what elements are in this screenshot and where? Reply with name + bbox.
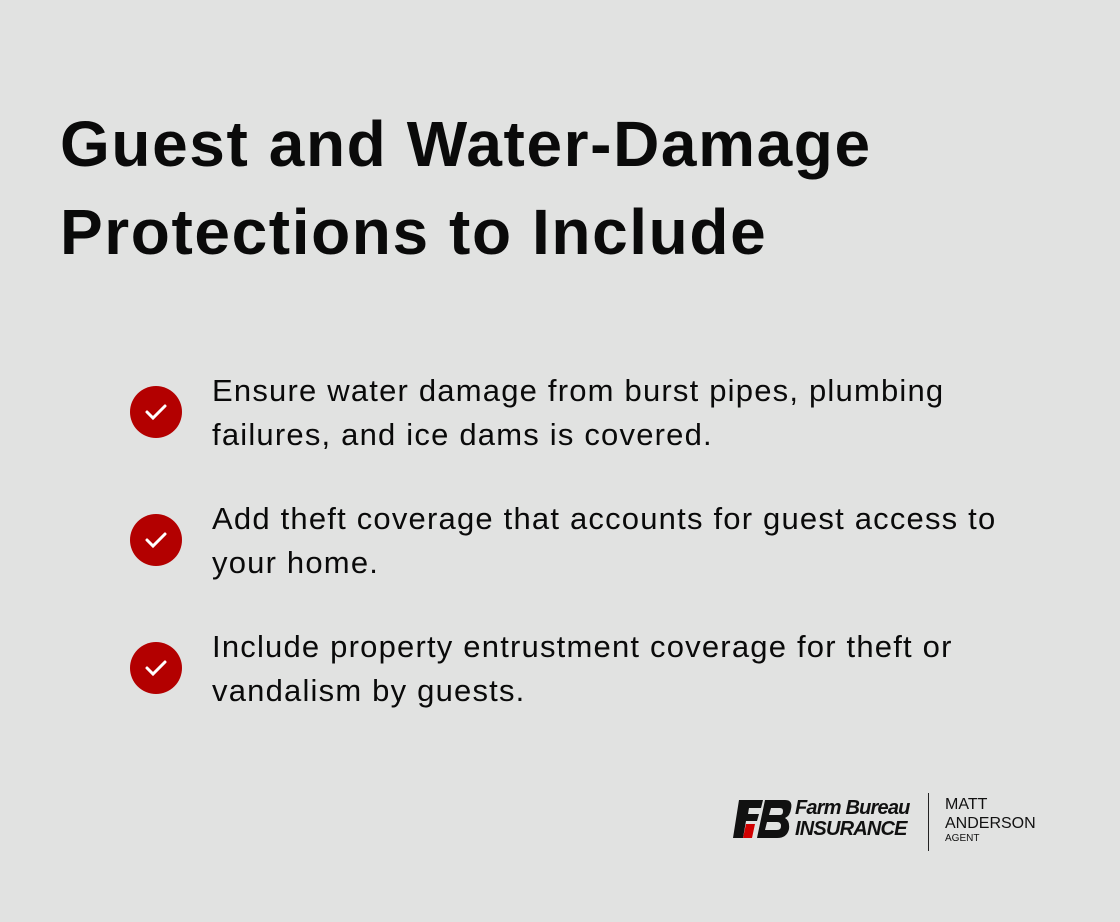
text: Add theft coverage that accounts for guest access to your home. xyxy=(212,501,996,580)
item: entrustment xyxy=(130,629,953,708)
text: Farm Bureau Insurance: INSURANCE xyxy=(795,818,907,840)
icon: check xyxy=(130,514,182,566)
icon: check xyxy=(130,386,182,438)
title: Protections to Include xyxy=(60,196,767,268)
item: theft xyxy=(130,501,996,580)
item: water damage xyxy=(130,373,944,452)
text: agent name: AGENT xyxy=(945,833,979,844)
text: Farm Bureau Insurance xyxy=(795,797,910,840)
text: agent name: ANDERSON xyxy=(945,815,1036,832)
text: Farm Bureau Insurance: Farm Bureau xyxy=(795,797,910,819)
divider xyxy=(928,793,929,851)
icon: FB mark xyxy=(733,800,792,838)
text: Include property entrustment coverage for theft or vandalism by guests. xyxy=(212,629,953,708)
title: Guest and Water-Damage xyxy=(60,108,872,180)
text: agent name xyxy=(945,796,1036,844)
text: Ensure water damage from burst pipes, plumbing failures, and ice dams is covered. xyxy=(212,373,944,452)
icon: check xyxy=(130,642,182,694)
logo xyxy=(733,793,1036,851)
text: agent name: MATT xyxy=(945,796,987,813)
title xyxy=(60,108,872,268)
